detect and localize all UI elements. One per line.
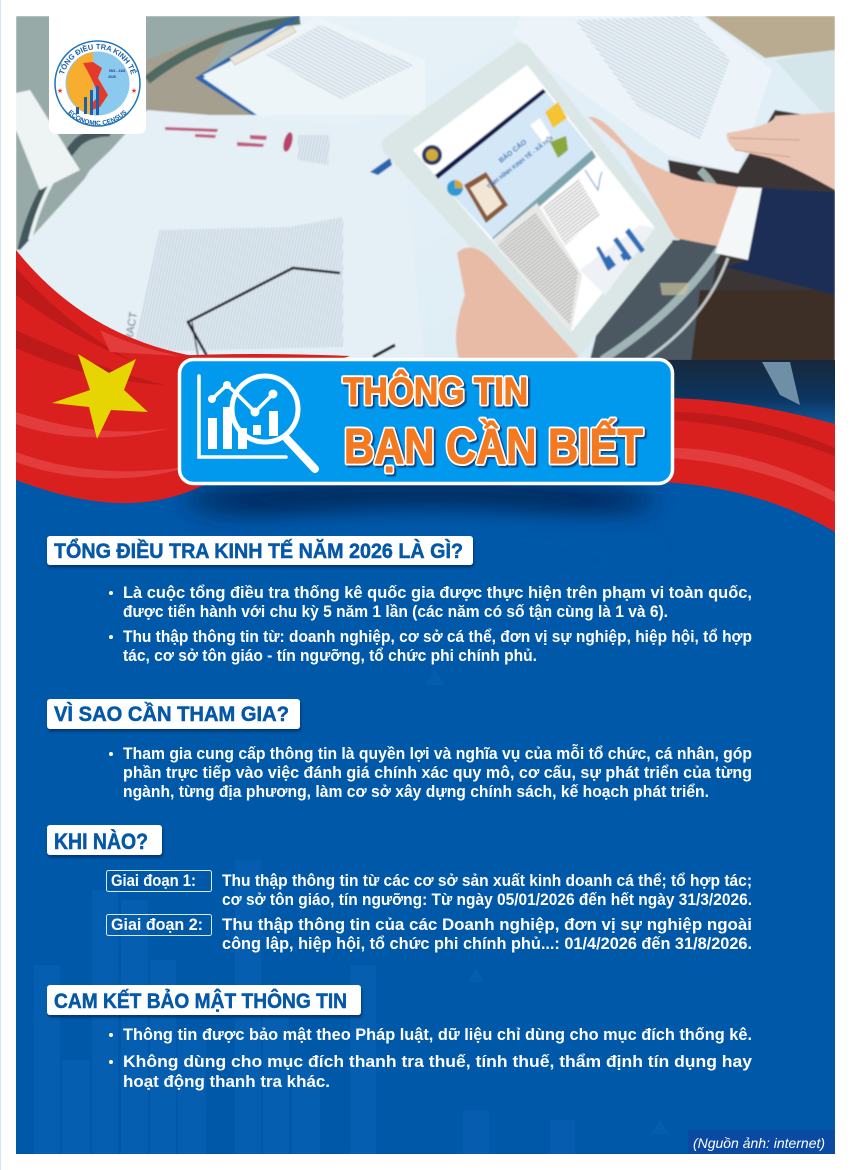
heading: CAM KẾT BẢO MẬT THÔNG TIN (54, 989, 347, 1013)
bullets: Không dùng cho mục đích thanh tra thuế, tính thuế, thẩm định tín dụng hay (123, 1053, 753, 1071)
bullets: Thông tin được bảo mật theo Pháp luật, dữ liệu chỉ dùng cho mục đích thống kê. (123, 1026, 752, 1044)
photo: tablet on desk with documents (16, 16, 835, 360)
bullets: hoạt động thanh tra khác. (123, 1073, 330, 1091)
title text (343, 368, 643, 474)
title text: BẠN CẦN BIẾT (344, 420, 643, 474)
heading: KHI NÀO? (54, 829, 148, 854)
photo: tablet on desk with documents: RACT (123, 311, 140, 343)
section: why participate (47, 699, 752, 801)
logo card: 2026 (108, 75, 116, 79)
left page edge tint (0, 0, 1, 1170)
bullets: tác, cơ sở tôn giáo - tín ngưỡng, tổ chức phi chính phủ. (123, 647, 537, 665)
logo card: 05/1 - 31/8 (109, 69, 125, 73)
icon: holding hands and cuff (588, 117, 742, 247)
title text: BẠN CẦN BIẾT (344, 420, 643, 474)
phase 2 (106, 914, 752, 953)
icon: glasses (188, 268, 395, 357)
phase 1: Thu thập thông tin từ các cơ sở sản xuất kinh doanh cá thể; tổ hợp tác; (222, 872, 752, 890)
title text: THÔNG TIN (343, 368, 528, 413)
icon: tablet (382, 42, 674, 358)
bullets: được tiến hành với chu kỳ 5 năm 1 lần (các năm có số tận cùng là 1 và 6). (123, 603, 668, 621)
phase 1: cơ sở tôn giáo, tín ngưỡng: Từ ngày 05/01/2026 đến hết ngày 31/3/2026. (222, 891, 752, 909)
bullets: Thu thập thông tin từ: doanh nghiệp, cơ sở cá thể, đơn vị sự nghiệp, hiệp hội, tổ hợp (123, 628, 752, 646)
title text: THÔNG TIN (343, 368, 528, 413)
blue background (16, 480, 835, 1154)
title banner (180, 360, 672, 484)
source note: (Nguồn ảnh: internet) (693, 1135, 825, 1151)
red flag ribbon (16, 250, 835, 532)
icon: right hand on paper (727, 112, 835, 190)
source note (688, 1130, 835, 1154)
logo card: TỔNG ĐIỀU TRA KINH TẾ (58, 44, 138, 75)
bullets: phần trực tiếp vào việc đánh giá chính xác quy mô, cơ cấu, sự phát triển của từng (123, 764, 752, 782)
phase 1: Giai đoạn 1: (111, 872, 196, 890)
bullets (109, 744, 752, 801)
logo card: ★ (57, 87, 63, 95)
bullets: Tham gia cung cấp thông tin là quyền lợi và nghĩa vụ của mỗi tổ chức, cá nhân, góp (123, 744, 752, 763)
photo: tablet on desk with documents: BÁO CÁO (497, 137, 529, 165)
section: what is it (47, 536, 752, 665)
phase 2: công lập, hiệp hội, tổ chức phi chính phủ...: 01/4/2026 đến 31/8/2026. (222, 935, 752, 953)
phase 1 (106, 870, 752, 909)
bullets (109, 1026, 753, 1091)
logo card: ECONOMIC CENSUS (68, 110, 126, 126)
phase 2: Thu thập thông tin của các Doanh nghiệp, đơn vị sự nghiệp ngoài (222, 916, 752, 934)
logo card: ★ (131, 87, 137, 95)
section: when (47, 825, 752, 953)
section: confidentiality (47, 985, 753, 1091)
icon: chart with magnifier (199, 376, 315, 469)
bullets: Là cuộc tổng điều tra thống kê quốc gia được thực hiện trên phạm vi toàn quốc, (123, 584, 752, 602)
icon: yellow star (52, 354, 148, 439)
heading: VÌ SAO CẦN THAM GIA? (54, 703, 289, 726)
phase 2: Giai đoạn 2: (111, 916, 203, 934)
heading: TỔNG ĐIỀU TRA KINH TẾ NĂM 2026 LÀ GÌ? (54, 539, 463, 563)
logo card (49, 16, 146, 134)
background bar pattern (34, 670, 670, 1155)
bullets (109, 584, 752, 665)
photo: tablet on desk with documents: TÌNH HÌNH KINH TẾ - XÃ HỘI (485, 134, 555, 191)
bullets: ngành, từng địa phương, làm cơ sở xây dựng chính sách, kế hoạch phát triển. (123, 783, 709, 801)
background right (664, 109, 835, 360)
title shadow (185, 476, 655, 524)
